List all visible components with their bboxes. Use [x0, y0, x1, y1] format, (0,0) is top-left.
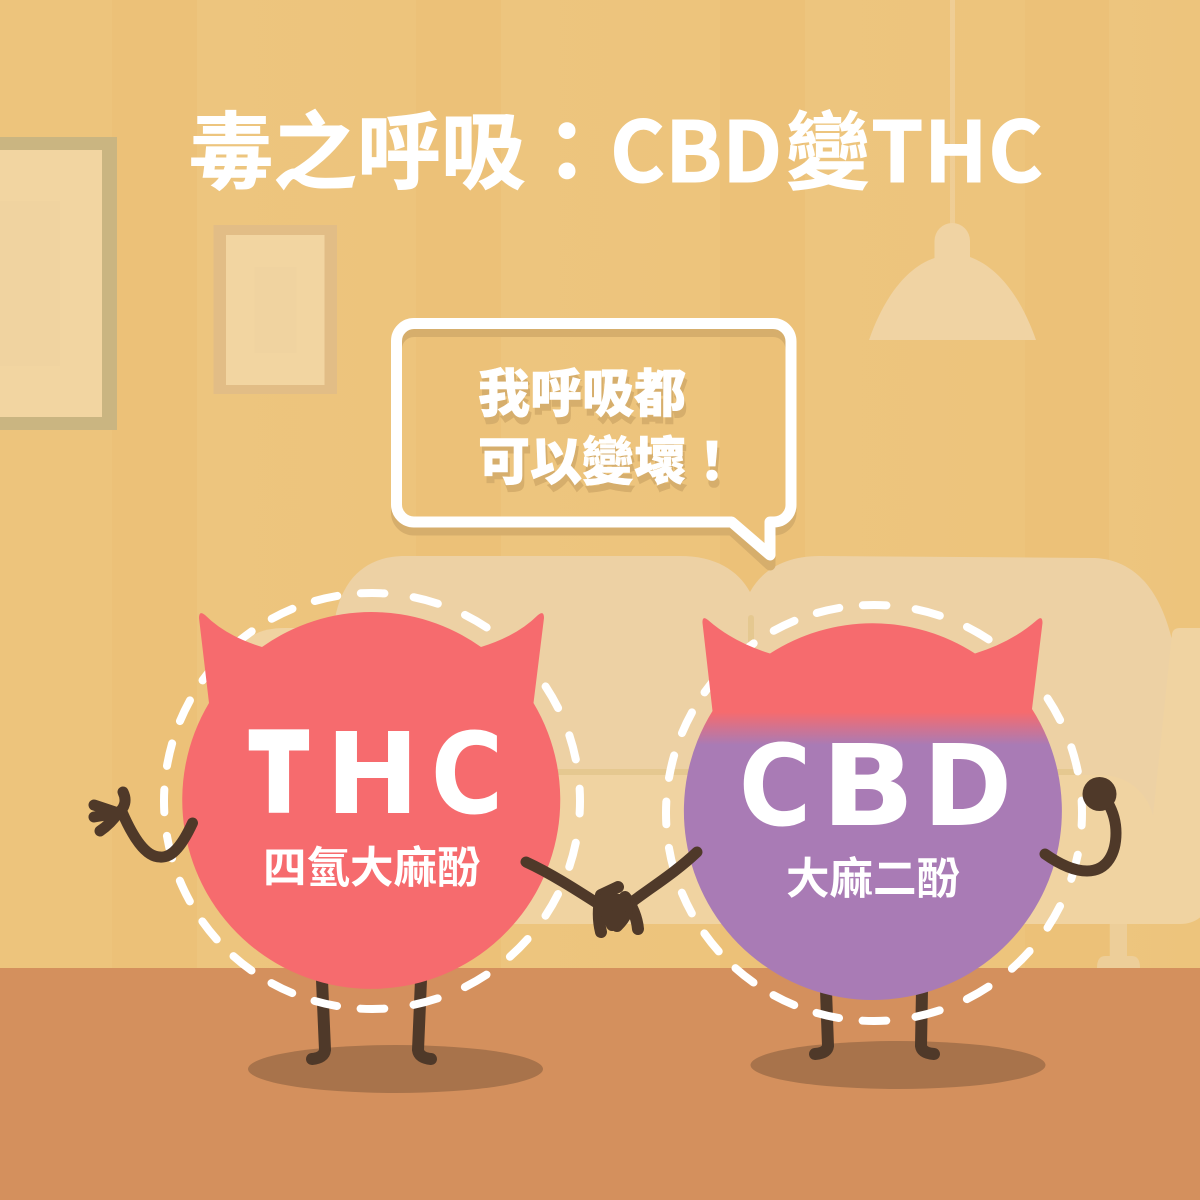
CBD label — [739, 721, 1012, 852]
THC label: C — [431, 709, 503, 840]
right leg — [921, 990, 934, 1054]
body — [182, 612, 560, 989]
sofa leg — [1097, 924, 1140, 968]
sofa left arm — [240, 628, 345, 700]
raised fist — [1082, 777, 1116, 811]
bubble text — [478, 352, 738, 495]
left leg — [815, 990, 828, 1054]
THC label: T — [251, 713, 307, 836]
chinese name: 大麻二酚 — [786, 844, 960, 907]
sofa seat line — [500, 769, 1075, 775]
title: THC — [871, 86, 1044, 207]
body — [684, 618, 1062, 1000]
CBD label: C — [739, 721, 811, 852]
speech bubble — [396, 324, 791, 565]
dashed ring — [666, 605, 1082, 1021]
waving arm — [94, 792, 192, 857]
bubble outline — [396, 324, 791, 555]
ground shadow — [248, 1045, 543, 1093]
THC label — [251, 709, 503, 840]
title: CBD — [610, 86, 782, 207]
bubble text: 我呼吸都 — [478, 352, 686, 427]
bubble shadow — [396, 332, 791, 565]
raised arm — [1045, 803, 1116, 871]
left leg — [312, 980, 325, 1059]
bubble text shadow: 可以變壞！ — [480, 427, 740, 502]
small picture frame — [214, 225, 337, 394]
sofa — [240, 556, 1200, 968]
chinese name: 四氫大麻酚 — [263, 833, 480, 896]
title: 毒之 — [189, 86, 357, 207]
character: THC — [94, 593, 600, 1093]
arm to holding hands — [628, 852, 697, 905]
held hands — [599, 887, 638, 932]
sofa seam — [748, 615, 754, 775]
bubble text shadow — [480, 359, 740, 502]
large picture frame — [0, 137, 117, 430]
bubble text shadow: 我呼吸都 — [480, 359, 688, 434]
CBD label: B — [821, 721, 915, 852]
ground shadow — [750, 1041, 1046, 1089]
sofa seat — [500, 628, 1200, 924]
floor — [0, 968, 1200, 1200]
dashed ring — [164, 593, 580, 1009]
arm to holding hands — [526, 862, 600, 905]
right leg — [418, 980, 431, 1059]
bubble text: 可以變壞！ — [478, 420, 738, 495]
title: 變 — [786, 86, 870, 207]
title: 呼吸： — [357, 86, 609, 207]
character: CBD — [628, 605, 1116, 1089]
sofa back cushions — [334, 556, 1172, 830]
pendant lamp — [869, 0, 1036, 340]
THC label: H — [326, 710, 419, 840]
CBD label: D — [923, 721, 1012, 852]
